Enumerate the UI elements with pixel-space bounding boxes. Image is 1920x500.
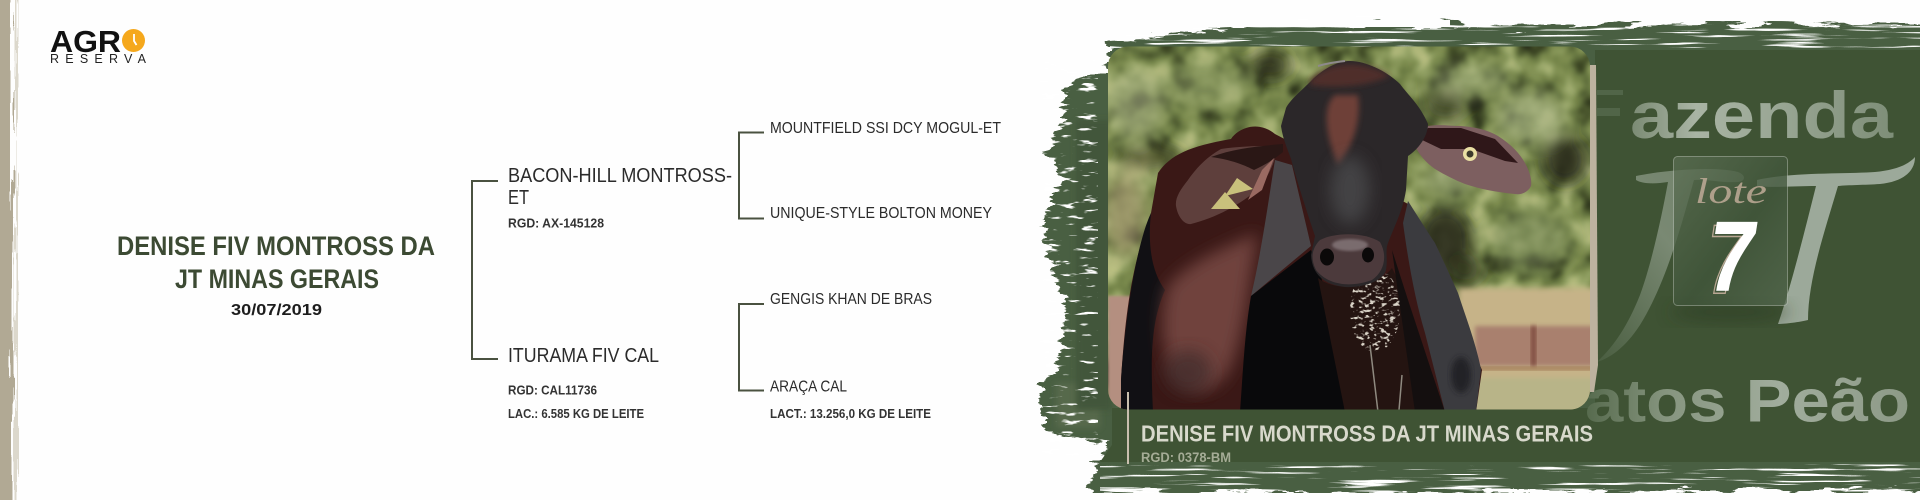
watermark: JT monogram <box>1597 157 1915 362</box>
lot badge: lote 7: 7 <box>1710 201 1758 311</box>
bracket: paternal grandparents <box>739 132 764 218</box>
sire: Bacon-Hill Montross-ET: RGD: AX-145128 <box>508 216 604 230</box>
grandparents names: MOUNTFIELD SSI DCY MOGUL-ET <box>770 120 1001 137</box>
logo: Agro Reserva: RESERVA <box>50 52 147 66</box>
cow body <box>1121 127 1482 412</box>
dam: Iturama FIV Cal: LAC.: 6.585 KG DE LEITE <box>508 407 644 421</box>
bracket: maternal grandparents <box>739 304 764 390</box>
watermark: Fazenda: azenda <box>1630 78 1895 152</box>
photo: Denise cow <box>1100 40 1600 420</box>
grandparents names: ARAÇA CAL <box>770 378 847 396</box>
grandparents names: UNIQUE-STYLE BOLTON MONEY <box>770 205 992 222</box>
sire: Bacon-Hill Montross-ET: ET <box>508 187 529 209</box>
dam: Iturama FIV Cal: ITURAMA FIV CAL <box>508 345 659 367</box>
lot badge: lote 7: 7 <box>1707 204 1755 314</box>
cow head <box>1281 61 1428 287</box>
sire: Bacon-Hill Montross-ET: BACON-HILL MONTROSS- <box>508 165 732 187</box>
heading: animal name and birth date <box>117 231 435 319</box>
beige strip behind photo <box>1590 65 1598 392</box>
caption: animal name and RGD: RGD: 0378-BM <box>1141 450 1231 465</box>
cow right ear with tag <box>1416 125 1531 194</box>
logo: Agro Reserva: AGR <box>50 25 121 59</box>
photo background: blurred foliage and paddock <box>1100 40 1600 420</box>
white brush streaks <box>1040 14 1920 500</box>
bracket: sire and dam <box>472 181 498 359</box>
caption: animal name and RGD <box>1127 392 1593 465</box>
watermark: Fatos Peão: atos Peão <box>1585 368 1910 434</box>
left beige brush border <box>0 0 17 500</box>
lot badge: lote 7: lote <box>1695 171 1767 211</box>
caption: animal name and RGD: DENISE FIV MONTROSS DA JT MINAS GERAIS <box>1141 420 1593 446</box>
grandparents names: GENGIS KHAN DE BRAS <box>770 291 932 308</box>
heading: animal name and birth date: DENISE FIV MONTROSS DA <box>117 231 435 261</box>
sire: Bacon-Hill Montross-ET <box>508 165 732 230</box>
ear tags <box>1211 178 1253 209</box>
green brush panel <box>1040 14 1920 500</box>
heading: animal name and birth date: JT MINAS GERAIS <box>175 264 379 294</box>
grandparents names <box>770 120 1001 421</box>
logo: Agro Reserva <box>50 25 147 66</box>
heading: animal name and birth date: 30/07/2019 <box>231 302 322 319</box>
grandparents names: LACT.: 13.256,0 KG DE LEITE <box>770 407 931 421</box>
pedigree tree <box>472 120 1001 421</box>
dam: Iturama FIV Cal <box>508 345 659 421</box>
dam: Iturama FIV Cal: RGD: CAL11736 <box>508 384 597 398</box>
cow left ear with tag <box>1176 144 1283 224</box>
lot badge: lote 7 <box>1670 156 1790 322</box>
